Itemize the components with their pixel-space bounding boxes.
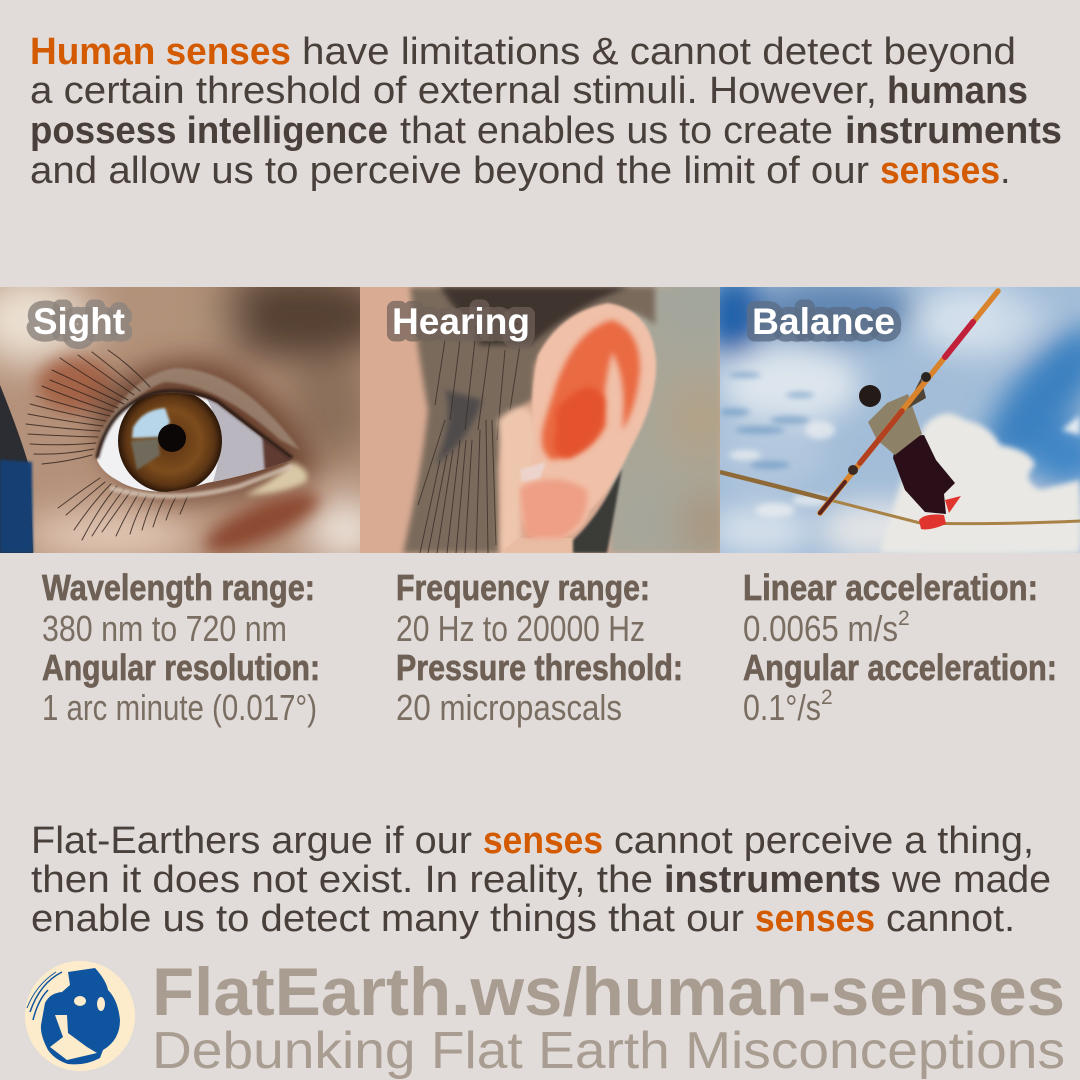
- intro text block: possess intelligence: [30, 110, 388, 152]
- left blue garment: [0, 385, 33, 553]
- stats: balance: 2: [898, 607, 910, 630]
- stats: hearing: Pressure threshold:: [396, 647, 683, 688]
- balancing pole: [820, 291, 998, 513]
- logo: flat earth globe: [25, 961, 135, 1071]
- intro text block: that enables us to create: [400, 110, 833, 152]
- stats: balance: 0.0065 m/s: [743, 608, 898, 649]
- stats: sight: 1 arc minute (0.017°): [42, 687, 317, 728]
- closing text block: cannot perceive a thing,: [614, 820, 1034, 862]
- label: Hearing: Hearing: [392, 301, 530, 342]
- pale lower lid strip: [110, 466, 292, 496]
- intro text block: instruments: [845, 110, 1062, 152]
- lower hair behind ear: [573, 468, 622, 553]
- intro text block: and allow us to perceive beyond the limit of our: [30, 150, 869, 192]
- closing text block: senses: [483, 820, 603, 862]
- skin in front of ear: [498, 407, 538, 553]
- panel: balance photo: [720, 287, 1080, 553]
- footer tagline: Debunking Flat Earth Misconceptions: [152, 1022, 1065, 1080]
- stats: hearing: 20 Hz to 20000 Hz: [396, 608, 645, 649]
- intro text block: humans: [887, 70, 1028, 112]
- iris: [118, 389, 222, 493]
- stats: sight: 380 nm to 720 nm: [42, 608, 287, 649]
- lid edge: [97, 391, 292, 458]
- stats: balance: [743, 567, 1057, 728]
- stats: sight: Wavelength range:: [42, 567, 315, 608]
- eyeball: [97, 392, 292, 492]
- stats: balance: 2: [821, 686, 833, 709]
- closing text block: enable us to detect many things that our: [31, 898, 744, 940]
- footer url: FlatEarth.ws/human-senses: [152, 954, 1065, 1030]
- ear: [519, 303, 656, 540]
- stats: hearing: 20 micropascals: [396, 687, 622, 728]
- clouds: [880, 414, 1080, 553]
- stats: balance: 0.1°/s: [743, 687, 821, 728]
- label: Balance: Balance: [752, 301, 895, 342]
- under-eye crease: [196, 484, 329, 553]
- panel: hearing photo: [360, 287, 720, 553]
- stats: sight: [42, 567, 320, 728]
- intro text block: [30, 31, 1062, 192]
- performer: [859, 378, 961, 529]
- closing text block: cannot.: [886, 898, 1015, 940]
- label: Sight: Sight: [33, 301, 125, 342]
- panel: sight photo: [0, 287, 360, 553]
- rope: [720, 472, 1080, 524]
- intro text block: .: [1000, 150, 1011, 192]
- closing text block: senses: [755, 898, 875, 940]
- intro text block: a certain threshold of external stimuli. However,: [30, 70, 877, 112]
- closing text block: then it does not exist. In reality, the: [31, 859, 653, 901]
- upper and lower lashes: [26, 350, 188, 540]
- intro text block: have limitations & cannot detect beyond: [302, 31, 1016, 73]
- closing text block: [31, 820, 1051, 940]
- stats: sight: Angular resolution:: [42, 647, 320, 688]
- stats: hearing: Frequency range:: [396, 567, 650, 608]
- stats: hearing: [396, 567, 683, 728]
- reddish shadow above lashes: [37, 357, 113, 413]
- closing text block: instruments: [664, 859, 881, 901]
- intro text block: Human senses: [30, 31, 291, 73]
- upper lid: [100, 368, 300, 450]
- closing text block: Flat-Earthers argue if our: [31, 820, 472, 862]
- closing text block: we made: [891, 859, 1051, 901]
- intro text block: senses: [880, 150, 1000, 192]
- stats: balance: Linear acceleration:: [743, 567, 1038, 608]
- hair and sideburn: [403, 287, 655, 553]
